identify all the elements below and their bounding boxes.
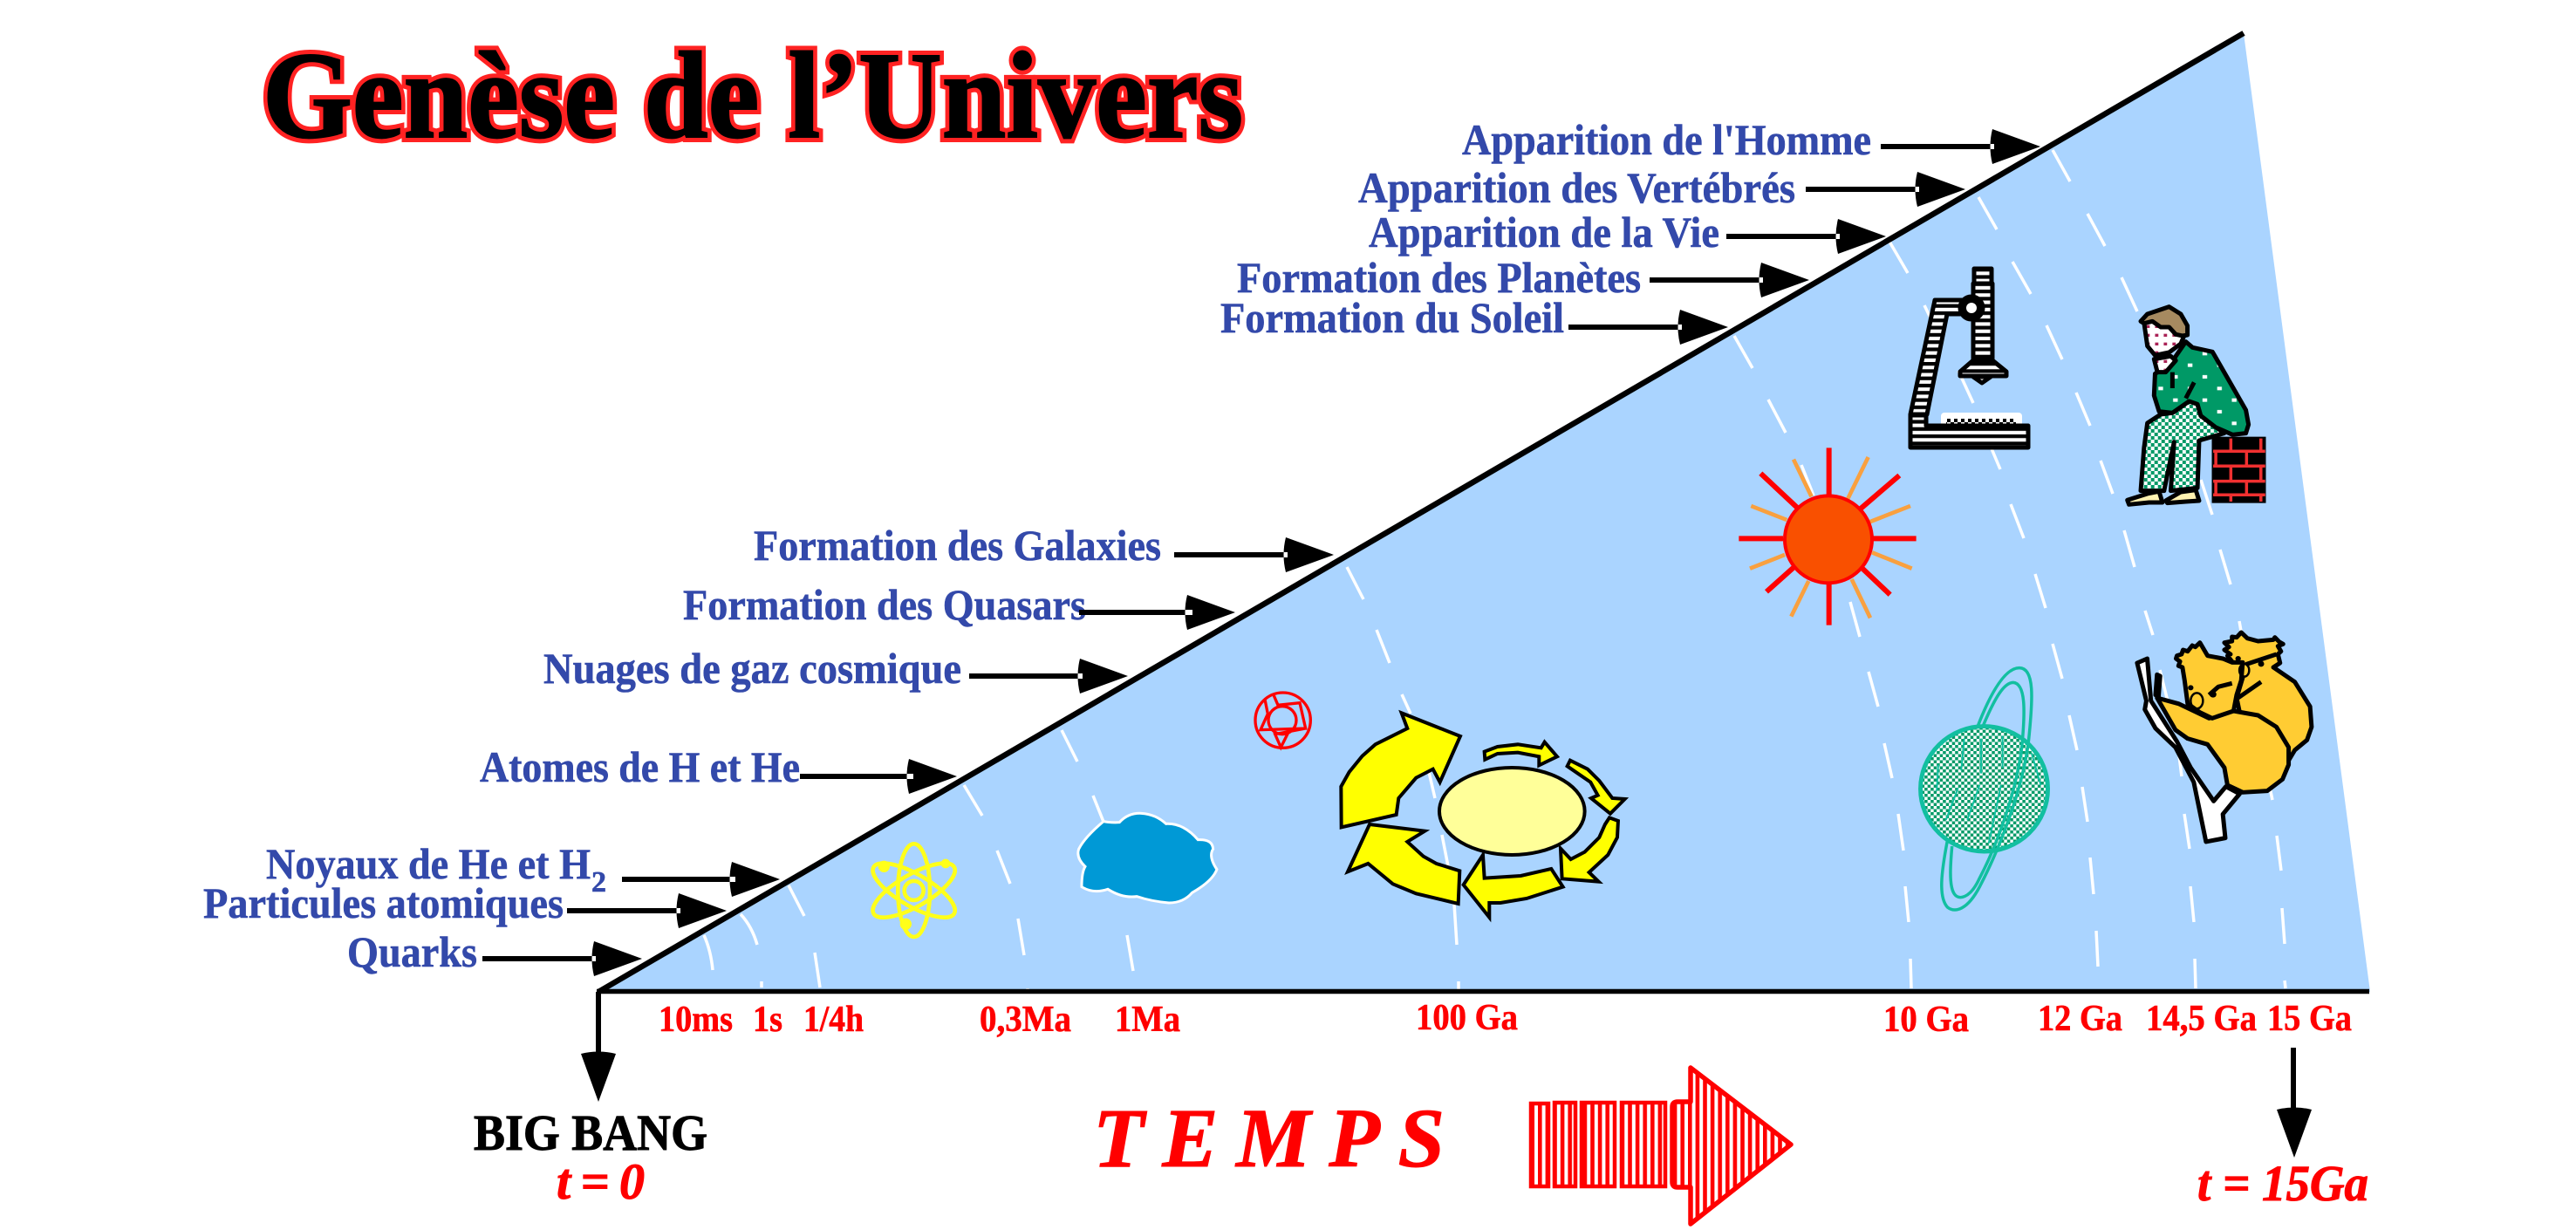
triangle edge xyxy=(598,33,2244,992)
arrow: large bottom-left xyxy=(1348,824,1459,904)
arrow: t=15Ga xyxy=(2277,1048,2312,1158)
label: Quasars: Formation des Quasars xyxy=(683,580,1086,629)
label: Noyaux: Noyaux de He et H xyxy=(266,839,591,888)
branch xyxy=(2137,659,2239,842)
icon: thinking man on bricks xyxy=(2128,307,2266,504)
label: Galaxies: Formation des Galaxies xyxy=(754,521,1161,570)
arrow: Big Bang xyxy=(581,992,616,1102)
arm xyxy=(1910,300,1971,414)
label: Planètes: Formation des Planètes xyxy=(1237,253,1641,302)
label: Homme: Apparition de l'Homme xyxy=(1462,115,1871,164)
hand xyxy=(2154,356,2176,372)
big bang label: BIG BANG xyxy=(474,1104,707,1161)
arrow: top right xyxy=(1568,761,1625,814)
trousers xyxy=(2141,401,2224,491)
arrow: Galaxies xyxy=(1174,537,1334,572)
label: Soleil: Formation du Soleil xyxy=(1220,293,1564,342)
upper tube xyxy=(1974,269,1992,284)
central ellipse xyxy=(1439,768,1585,855)
arrow: bottom right xyxy=(1561,817,1618,882)
tick: 14,5 Ga: 14,5 Ga xyxy=(2146,999,2257,1039)
label: Vertébrés: Apparition des Vertébrés xyxy=(1358,163,1795,212)
tick: 10 Ga: 10 Ga xyxy=(1883,1000,1969,1040)
title: Genèse de l’Univers xyxy=(263,26,1243,164)
tick: 15 Ga: 15 Ga xyxy=(2267,999,2352,1039)
base xyxy=(1910,415,2028,448)
koala faces xyxy=(2209,654,2277,698)
orange rays xyxy=(1750,457,1912,618)
disc streaks xyxy=(1937,735,2040,844)
arrow: Noyaux xyxy=(622,862,780,897)
tick: 1s: 1s xyxy=(753,1000,782,1040)
front koala head xyxy=(2176,643,2243,718)
tick: 1/4h: 1/4h xyxy=(803,1000,864,1040)
icon: koalas on tree xyxy=(2137,632,2312,842)
axis time labels xyxy=(659,998,2352,1040)
arrow: bottom xyxy=(1464,855,1563,918)
sun disc xyxy=(1785,495,1872,583)
icon: sun xyxy=(1739,448,1917,625)
label: Atomes: Atomes de H et He xyxy=(480,742,800,791)
arrow: Quasars xyxy=(1079,595,1235,630)
arrow: Vertébrés xyxy=(1806,172,1965,207)
main tube xyxy=(1973,284,1992,360)
arrow: Soleil xyxy=(1568,310,1728,345)
title: Genèse de l’Univers xyxy=(263,26,1243,164)
inner ring xyxy=(1951,682,2024,898)
icon: rotating cycle xyxy=(1341,713,1625,918)
arrow: Atomes xyxy=(800,759,957,794)
icon: atom xyxy=(865,844,962,937)
label: Noyaux: 2 xyxy=(591,866,606,899)
TEMPS label: TEMPS xyxy=(1093,1091,1445,1185)
icon: red star ring xyxy=(1255,693,1310,748)
arrow: Vie xyxy=(1726,219,1886,254)
front koala body xyxy=(2157,698,2289,792)
icon: microscope xyxy=(1910,269,2028,448)
planet disc xyxy=(1921,727,2048,851)
time axis xyxy=(597,989,2369,994)
arrow: Quarks xyxy=(482,941,642,976)
tick: 10ms: 10ms xyxy=(659,1000,733,1040)
hair xyxy=(2141,307,2188,336)
event labels xyxy=(203,115,1871,976)
tick: 1Ma: 1Ma xyxy=(1115,1000,1180,1040)
objective head xyxy=(1960,360,2006,376)
back koala xyxy=(2224,632,2312,761)
icon: ringed planet xyxy=(1921,668,2048,910)
claw xyxy=(2156,674,2160,696)
panel: universe time triangle xyxy=(598,33,2370,992)
red rays xyxy=(1739,448,1917,625)
arrow: large top-left xyxy=(1341,713,1460,827)
label: Particules: Particules atomiques xyxy=(203,878,564,927)
jacket fold xyxy=(2172,372,2194,399)
tick: 100 Ga: 100 Ga xyxy=(1416,998,1518,1038)
jacket xyxy=(2154,342,2249,434)
label: Vie: Apparition de la Vie xyxy=(1369,208,1719,256)
t=15Ga label: t = 15Ga xyxy=(2197,1155,2368,1212)
arrow: Homme xyxy=(1881,129,2040,164)
stage xyxy=(1941,413,2022,427)
bricks xyxy=(2212,437,2266,503)
arrow: Particules xyxy=(567,893,727,928)
shoes xyxy=(2128,491,2163,504)
label: Nuages: Nuages de gaz cosmique xyxy=(543,644,961,693)
label: Quarks: Quarks xyxy=(347,927,477,976)
outer ring xyxy=(1942,668,2032,910)
icon: gas cloud xyxy=(1078,813,1217,903)
pivot xyxy=(1960,297,1983,319)
tick: 0,3Ma: 0,3Ma xyxy=(980,1000,1071,1040)
t=0 label: t=0 xyxy=(557,1153,645,1210)
event arrows xyxy=(482,129,2312,1158)
arrow: top xyxy=(1485,742,1557,765)
dashed time curves xyxy=(704,150,2286,992)
arrow: Planètes xyxy=(1650,263,1809,297)
striped time arrow xyxy=(1531,1068,1791,1224)
face xyxy=(2144,321,2184,355)
arrow: Nuages xyxy=(969,659,1128,694)
tick: 12 Ga: 12 Ga xyxy=(2038,999,2122,1039)
